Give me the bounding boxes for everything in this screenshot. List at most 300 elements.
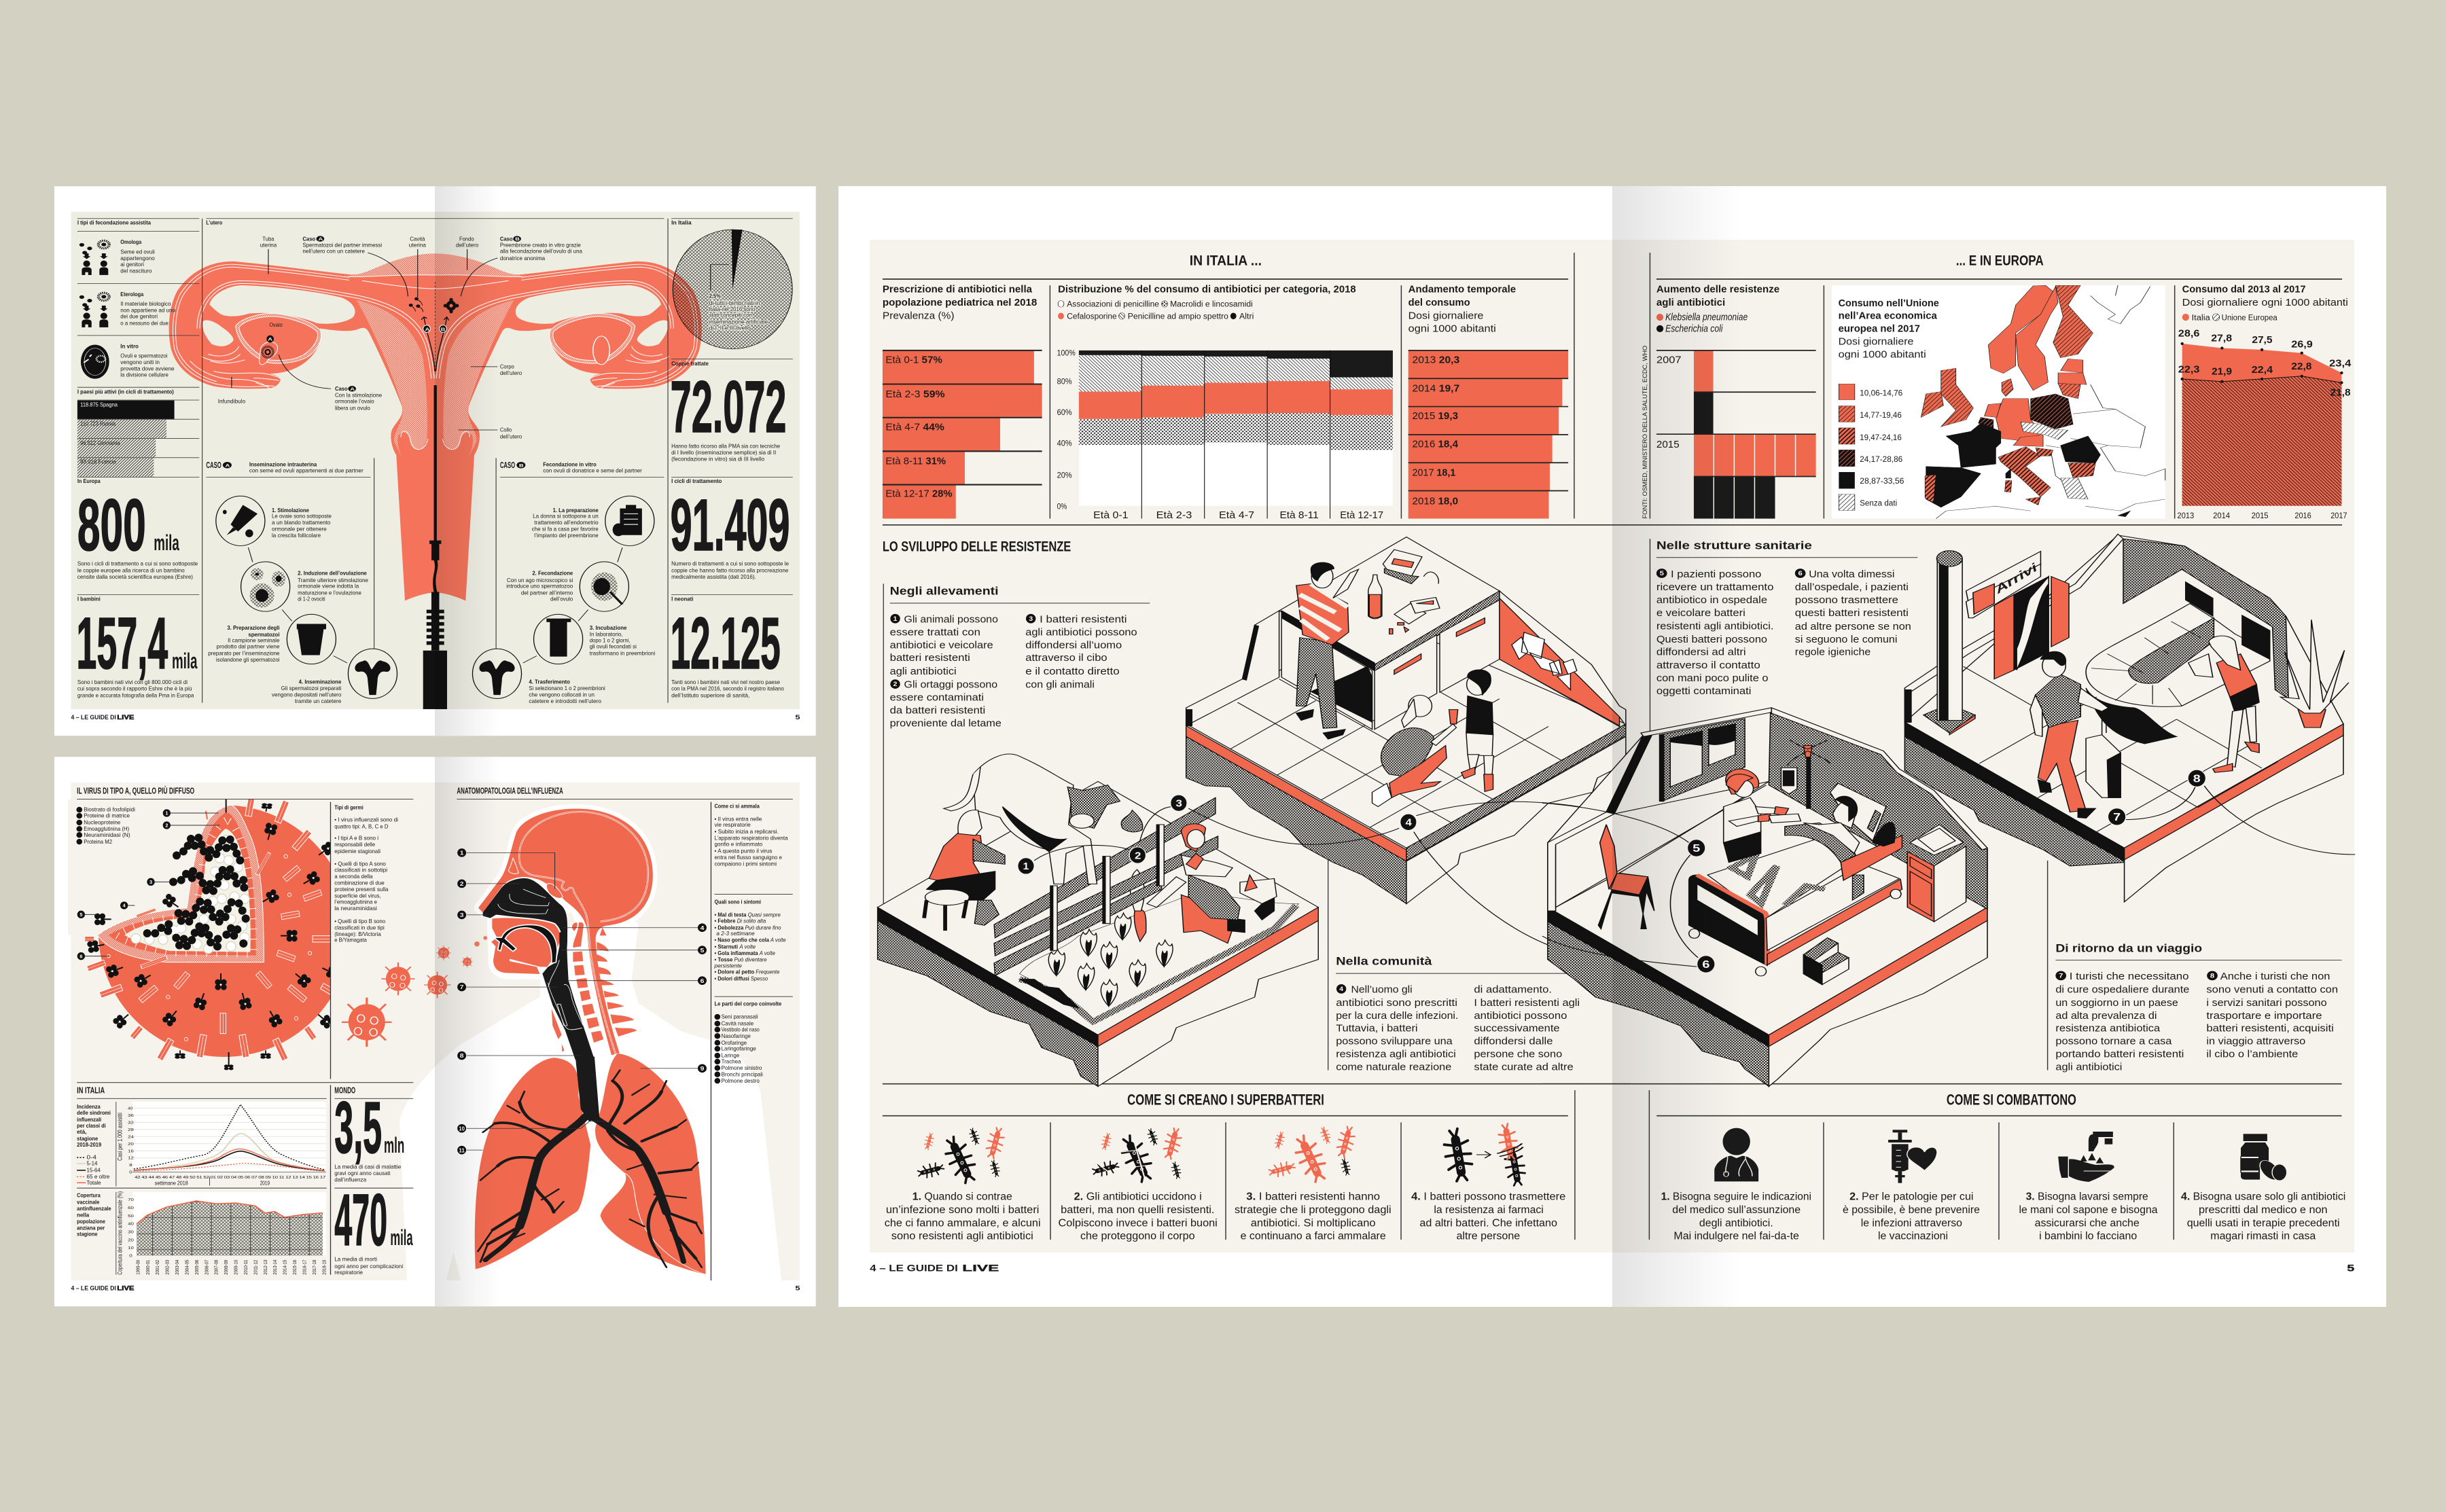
text: on farms: e il contatto diretto: [1025, 665, 1120, 677]
text: steps: del medico sull’assunzione: [1672, 1204, 1801, 1216]
section: in Italia charts: Altri: [1239, 312, 1254, 321]
text over pie chart: [709, 293, 768, 331]
virus legend: Biostrato di fosfolipidi: [84, 807, 135, 813]
text: symptoms and body parts: Cavità nasale: [722, 1021, 754, 1027]
text: case A and case B steps: trasformano in preembrioni: [590, 651, 655, 657]
text: returning from a trip: il cibo o l’ambiente: [2206, 1048, 2298, 1060]
text: on farms: [890, 585, 1137, 729]
footer: [71, 715, 800, 721]
text: left column: dei due genitori: [120, 314, 158, 320]
text: left column: del nascituro: [120, 268, 152, 274]
stacked bar chart: consumption by category: Età 0-1: [1093, 510, 1129, 521]
text: in hospitals: antibiotico in ospedale: [1656, 594, 1767, 605]
rules: [883, 583, 1631, 1084]
circuit lines and markers 1-4: 4: [1406, 816, 1412, 828]
text: left column: provetta dove avviene: [120, 366, 175, 372]
area chart: Italy vs EU consumption: 2013: [2177, 511, 2194, 520]
text: chart headers: ogni 1000 abitanti: [1408, 323, 1496, 334]
virus callouts: 2: [165, 823, 168, 829]
bar chart: paediatric prevalence: Età 12-17 28%: [885, 488, 953, 499]
text: steps: sono resistenti agli antibiotici: [891, 1231, 1033, 1242]
text: right column: In Italia: [671, 220, 692, 226]
text: steps: che ci fanno ammalare, e alcuni: [885, 1218, 1041, 1229]
area chart: Italy vs EU consumption: 22,8: [2291, 361, 2311, 372]
text: left column: ai genitori: [120, 262, 144, 268]
area chart: vaccine coverage: 2004-05: [185, 1259, 190, 1275]
text: steps: 1. Bisogna seguire le indicazioni: [1661, 1191, 1811, 1202]
area chart: Italy vs EU consumption: 2015: [2252, 511, 2269, 520]
text: steps: 1. Quando si contrae: [912, 1191, 1012, 1202]
uterus details in page units: 157,4: [76, 603, 168, 684]
map of Europe: 10,06-14,76: [1860, 389, 1902, 398]
text: case A and case B steps: maturazione e l’ovulazione: [298, 590, 361, 596]
anatomy callouts: 11: [459, 1148, 465, 1154]
text: case A and case B steps: Il campione seminale: [228, 638, 280, 644]
bar chart: trend over time: 2013 20,3: [1413, 355, 1459, 365]
text: uterus labels: ormonale l’ovaio: [335, 399, 374, 405]
area chart: Italy vs EU consumption: [2177, 284, 2352, 520]
text: symptoms and body parts: Trachea: [722, 1059, 741, 1065]
text: types of germs: • I tipi A e B sono i: [334, 835, 378, 842]
text: in hospitals: ricevere un trattamento: [1656, 581, 1773, 592]
text: left column: le coppie europee alla ricerca di un bambino: [77, 568, 185, 574]
area chart: vaccine coverage: 1999-00: [136, 1259, 141, 1275]
stacked bar chart: consumption by category: Età 12-17: [1340, 510, 1383, 521]
text: on farms: antibiotici e veicolare: [890, 639, 993, 651]
text: uterus labels: Caso: [302, 236, 315, 242]
cervical vertebrae: [552, 922, 637, 1051]
icon: medicine bottle: [2241, 1134, 2287, 1181]
text: types of germs: e B/Yamagata: [334, 937, 367, 943]
text: steps: che proteggono il corpo: [1080, 1231, 1195, 1242]
text: types of germs: superficie del virus,: [334, 893, 381, 899]
text: case A and case B steps: CASO: [206, 461, 221, 470]
area chart: Italy vs EU consumption: 22,3: [2178, 364, 2199, 375]
text: in hospitals: Questi batteri possono: [1656, 634, 1767, 645]
skull and spinal canal: [478, 809, 653, 1055]
footer: LIVE: [962, 1263, 999, 1274]
text: community: diffondersi dalle: [1474, 1035, 1553, 1047]
text: types of germs: • Quelli di tipo B sono: [334, 918, 386, 924]
text: types of germs: epidemie stagionali: [334, 848, 380, 854]
nasal cavity: [483, 878, 567, 960]
text: on farms: da batteri resistenti: [890, 704, 985, 716]
text: uterus labels: A: [268, 337, 272, 342]
text: right column: I cicli di trattamento: [671, 478, 722, 484]
text: types of germs: proteine presenti sulla: [334, 886, 389, 893]
text: types of germs: • I virus influenzali sono di: [334, 817, 398, 823]
text: steps: è possibile, è bene prevenire: [1843, 1204, 1980, 1216]
text: uterus labels: Caso: [335, 386, 348, 392]
text: right column: dell’Istituto superiore di sanità,: [671, 693, 749, 699]
text: symptoms and body parts: • Naso gonfio che cola A volte: [715, 937, 786, 943]
text: left column: la divisione cellulare: [120, 372, 169, 378]
text: right column: [671, 220, 789, 699]
text: symptoms and body parts: • Tosse Può diventare: [715, 957, 767, 963]
area chart: vaccine coverage: 2001-02: [156, 1259, 161, 1275]
dotted rear wall: [2123, 539, 2288, 699]
line chart: flu incidence: settimane 2018: [155, 1181, 188, 1187]
text: case A and case B steps: 4. Inseminazione: [299, 679, 342, 685]
text: symptoms and body parts: • A questa punto il virus: [715, 848, 773, 854]
illustration: farm block: [878, 754, 1318, 1086]
bar chart: trend over time: 2015 19,3: [1413, 411, 1458, 422]
stacked bar chart: consumption by category: 100%: [1057, 348, 1076, 357]
text: returning from a trip: un soggiorno in un paese: [2055, 996, 2178, 1008]
virus callouts: [77, 809, 219, 960]
spread: antibiotics page and panel: [838, 186, 2386, 1307]
anatomy callouts: 1: [460, 850, 464, 857]
text: case A and case B steps: introduce uno spermatozoo: [506, 583, 573, 590]
text: returning from a trip: di cure ospedaliere durante: [2055, 984, 2189, 995]
text: case A and case B steps: con seme ed ovuli appartenenti ai due partner: [249, 468, 364, 474]
text: symptoms and body parts: • Febbre Di solito alta: [715, 918, 766, 924]
text: symptoms and body parts: Nasofaringe: [722, 1033, 751, 1039]
text: left column: vengono uniti in: [120, 360, 160, 366]
page: influenza, charts and text: mila: [390, 1226, 413, 1250]
text: on farms: essere trattati con: [890, 626, 980, 638]
text: left column: [77, 220, 198, 699]
line chart: flu incidence: 12: [128, 1157, 134, 1160]
reception desk: [2086, 582, 2270, 744]
uterus details in page units: [71, 219, 800, 721]
area chart: vaccine coverage: 50: [128, 1214, 134, 1219]
area chart: vaccine coverage: popolazione: [77, 1219, 105, 1225]
text: on farms: diffondersi all’uomo: [1025, 639, 1122, 651]
bar chart: paediatric prevalence: Età 0-1 57%: [885, 355, 942, 365]
line chart: flu incidence: Casi per 1.000 assistiti: [116, 1113, 124, 1161]
footer: [71, 1285, 800, 1292]
text: steps: degli antibiotici.: [1699, 1218, 1773, 1229]
text: case A and case B steps: Le ovaie sono sottoposte: [272, 514, 332, 520]
text: uterus labels: Ovaio: [269, 322, 283, 328]
text: in hospitals: questi batteri resistenti: [1795, 607, 1909, 618]
rules: [883, 1090, 1575, 1240]
area chart: Italy vs EU consumption: 21,9: [2212, 366, 2232, 377]
text: in hospitals: 6: [1798, 570, 1803, 577]
text: on farms: agli antibiotici: [890, 665, 957, 677]
text: uterus labels: A: [425, 327, 429, 332]
nurse: [1724, 769, 1801, 863]
left lung: [475, 1058, 590, 1269]
bar chart: trend over time: 2014 19,7: [1413, 383, 1459, 394]
hatched shell: [97, 805, 264, 962]
rules: [1649, 1090, 2341, 1240]
line chart: flu incidence: 20: [128, 1142, 134, 1146]
text: returning from a trip: Di ritorno da un viaggio: [2055, 941, 2202, 954]
area chart: vaccine coverage: vaccinale: [77, 1200, 100, 1206]
text: case A and case B steps: Tramite ulteriore stimolazione: [298, 577, 368, 583]
area chart: Italy vs EU consumption: Italia: [2192, 313, 2210, 322]
big numbers: world: dall’influenza: [334, 1177, 367, 1183]
text: types of germs: classificati in sottotipi: [334, 867, 387, 874]
text: left column: I bambini: [77, 596, 101, 602]
nucleoproteins: [147, 838, 246, 946]
anatomy callouts: 3: [460, 912, 464, 919]
text: case A and case B steps: Inseminazione intrauterina: [249, 462, 317, 468]
text: right column: Tanti sono i bambini nati vivi nel nostro paese: [671, 679, 780, 685]
line chart: flu incidence: 15-64: [87, 1168, 101, 1174]
text: case A and case B steps: [206, 461, 655, 705]
area chart: Italy vs EU consumption: 23,4: [2329, 358, 2352, 369]
line chart: flu incidence: 32: [128, 1121, 134, 1125]
text: left column: I tipi di fecondazione assistita: [77, 220, 151, 226]
text: symptoms and body parts: Polmone destro: [722, 1078, 760, 1084]
text: case A and case B steps: gli ovuli fecondati si: [590, 644, 637, 650]
text: symptoms and body parts: Quali sono i sintomi: [715, 899, 761, 905]
gardener: [1147, 824, 1277, 943]
bar chart: rising resistance: [1656, 284, 1816, 519]
area chart: vaccine coverage: antinfluenzale: [77, 1206, 111, 1212]
area chart: vaccine coverage: 2009-10: [234, 1259, 239, 1275]
map of Europe: [1832, 285, 2165, 519]
airport circuit and markers 7-8: 8: [2193, 773, 2201, 785]
map of Europe: Dosi giornaliere: [1839, 336, 1913, 347]
text: returning from a trip: resistenza antibiotica: [2055, 1022, 2161, 1034]
text: steps: assicurarsi che anche: [2035, 1218, 2140, 1229]
text: uterus labels: Tuba: [262, 236, 274, 242]
section: in Europa charts: ... E IN EUROPA: [1956, 252, 2044, 268]
map legend: [1839, 384, 1904, 510]
footer: 5: [795, 1285, 800, 1292]
line chart: flu incidence: 16: [128, 1149, 134, 1153]
text: steps: [885, 1191, 1565, 1242]
potted plant: [2280, 619, 2349, 727]
area chart: vaccine coverage: 2006-07: [205, 1259, 210, 1275]
right ovary follicle: [593, 336, 609, 365]
virus legend: Neuraminidasi (N): [84, 832, 130, 838]
stacked bar chart: consumption by category: 20%: [1057, 470, 1072, 480]
text: returning from a trip: sono venuti a contatto con: [2206, 984, 2338, 995]
text: steps: ad altri batteri. Che infettano: [1419, 1218, 1557, 1229]
text: case A and case B steps: 3. Incubazione: [590, 625, 627, 631]
small ovals: [107, 854, 312, 1041]
section: in Italia charts: Macrolidi e lincosamidi: [1170, 300, 1253, 309]
text: uterus labels: alla fecondazione dell’ovulo di una: [500, 249, 582, 255]
text: left column: grande e accurata fotografia della Pma in Europa: [77, 693, 194, 699]
text: community: persone che sono: [1474, 1048, 1562, 1060]
text: steps: antibiotici. Si moltiplicano: [1251, 1218, 1376, 1229]
chart: most active countries: 96.512 Germania: [80, 440, 120, 446]
text: left column: In Europa: [77, 478, 101, 484]
text: symptoms and body parts: Vestibolo del naso: [722, 1027, 760, 1033]
text: returning from a trip: portando batteri resistenti: [2055, 1048, 2184, 1060]
text: returning from a trip: 7: [2059, 972, 2063, 979]
area chart: vaccine coverage: 2013-14: [272, 1259, 278, 1275]
text: case A and case B steps: Fecondazione in vitro: [543, 462, 597, 468]
section rules: [1617, 253, 2342, 525]
section rules: [883, 253, 1617, 525]
text: types of germs: a seconda della: [334, 874, 373, 880]
text: case A and case B steps: vengono depositati nell’utero: [272, 692, 342, 698]
virus legend: [76, 807, 135, 845]
text: case A and case B steps: trattamento all’endometrio: [534, 520, 599, 526]
circuit lines and markers 1-4: 1: [1023, 861, 1029, 872]
lipid eggs: [136, 840, 245, 949]
text: uterus labels: uterina: [409, 242, 426, 249]
bar chart: trend over time: 2016 18,4: [1413, 439, 1458, 450]
text: uterus labels: B: [441, 327, 445, 332]
non-EU outlines: [1936, 285, 2165, 519]
legend: categories: Penicilline ad ampio spettro: [1128, 312, 1228, 321]
text: case A and case B steps: l’impianto del preembrione: [534, 533, 599, 539]
text: symptoms and body parts: • Gola infiammata A volte: [715, 950, 775, 957]
text: symptoms and body parts: Polmone sinistro: [722, 1065, 762, 1071]
area chart: vaccine coverage: 70: [128, 1198, 134, 1202]
virus callouts: 3: [149, 879, 152, 885]
white halo: [478, 809, 653, 975]
ovary: [236, 313, 321, 363]
farmer: [924, 810, 1005, 931]
text: steps: Mai indulgere nel fai-da-te: [1673, 1231, 1799, 1242]
countries by dose: [1921, 285, 2130, 517]
text: symptoms and body parts: Bronchi principali: [722, 1072, 763, 1078]
text: returning from a trip: in viaggio attraverso: [2206, 1035, 2305, 1047]
area chart: vaccine coverage: 2012-13: [263, 1259, 268, 1275]
text: in hospitals: possono trasmettere: [1795, 594, 1898, 605]
text: uterus labels: Con la stimolazione: [335, 393, 382, 399]
area chart: Italy vs EU consumption: 22,4: [2252, 364, 2273, 376]
page: influenza, white page, panel and body silhouette: [54, 757, 816, 1306]
text: types of germs: la neuraminidasi: [334, 905, 377, 912]
area chart: vaccine coverage: 2008-09: [224, 1259, 229, 1275]
area chart: Italy vs EU consumption: 27,8: [2211, 333, 2232, 344]
bar chart: trend over time: 2018 18,0: [1413, 496, 1458, 507]
virus legend: Emoagglutinina (H): [84, 826, 129, 832]
text: steps: 2. Gli antibiotici uccidono i: [1074, 1191, 1202, 1202]
map of Europe: 19,47-24,16: [1860, 433, 1902, 442]
text: steps: le vaccinazioni: [1878, 1231, 1948, 1242]
text: 12.125: [671, 603, 781, 684]
anatomy callouts: 9: [701, 1066, 705, 1072]
area chart: vaccine coverage: 2015-16: [292, 1259, 298, 1275]
hospital circuit and markers 5-6: 5: [1692, 843, 1700, 854]
text: uterus labels: Infundibulo: [218, 399, 246, 405]
area chart: vaccine coverage: 2007-08: [214, 1259, 219, 1275]
text: chart headers: popolazione pediatrica nel 2018: [883, 297, 1037, 308]
text: in hospitals: 5: [1660, 570, 1664, 577]
line chart: flu incidence: 8: [129, 1164, 132, 1168]
text: types of germs: quattro tipi: A, B, C e D: [334, 824, 389, 830]
text: chart headers: [883, 284, 1516, 334]
bar chart: paediatric prevalence: Età 4-7 44%: [885, 422, 944, 433]
area chart: vaccine coverage: 60: [128, 1206, 134, 1210]
text: case A and case B steps: spermatozoi: [248, 632, 280, 638]
text: right column: di I livello (inseminazione semplice) sia di II: [671, 450, 776, 456]
text: in hospitals: attraverso il contatto: [1656, 659, 1760, 670]
title: IL VIRUS DI TIPO A, QUELLO PIÙ DIFFUSO: [77, 786, 194, 796]
line chart: flu incidence: Incidenza: [77, 1104, 101, 1110]
stacked bar chart: consumption by category: Età 2-3: [1156, 510, 1192, 521]
lower face: [491, 917, 561, 975]
fork to A and B: [421, 317, 449, 372]
illustration: airport block: Arrivi: [1992, 560, 2041, 596]
text: symptoms and body parts: • Debolezza Può durare fino: [715, 925, 781, 931]
virus callouts: 6: [79, 953, 82, 959]
kitchen wall: [1186, 611, 1279, 725]
icon: bacteria step 2: [1091, 1127, 1184, 1185]
area chart: Italy vs EU consumption: 27,5: [2252, 334, 2272, 345]
section: in Europa charts: [1617, 252, 2352, 525]
area chart: vaccine coverage: Copertura del vaccino antinfluenzale (%): [116, 1191, 124, 1275]
text: in hospitals: resistenti agli antibiotici.: [1656, 620, 1773, 632]
text: case A and case B steps: tramite un catetere: [295, 699, 341, 705]
text: on farms: Negli allevamenti: [890, 585, 999, 597]
stacked bar chart: consumption by category: 60%: [1057, 408, 1072, 417]
text: case A and case B steps: 1. La preparazione: [553, 507, 599, 514]
text: uterus labels: dell’utero: [500, 370, 522, 376]
text: right column: (fecondazione in vitro) sia di III livello: [671, 456, 765, 463]
text: right column: Hanno fatto ricorso alla PMA sia con tecniche: [671, 444, 780, 450]
dome hatching: [340, 253, 436, 276]
icon: bacteria step 4: [1441, 1123, 1527, 1187]
text: on farms: attraverso il cibo: [1025, 652, 1107, 664]
bar chart: rising resistance: 2007: [1656, 355, 1682, 365]
arrivals sign: [1966, 552, 2040, 618]
text: community: 4: [1339, 986, 1344, 993]
tongue airway: [495, 924, 557, 963]
holes between tube and ovary: [202, 285, 355, 346]
step icons: [216, 496, 654, 698]
text: community: antibiotici possono: [1474, 1009, 1567, 1021]
text: left column: cui sopra secondo il rapporto Eshre che è la più: [77, 686, 192, 692]
virus legend: Proteine di matrice: [84, 813, 130, 819]
text: left column: Il materiale biologico: [120, 301, 171, 307]
text: community: come naturale reazione: [1336, 1061, 1451, 1073]
page: assisted fertilisation, white page with panel: [54, 186, 816, 736]
text: symptoms and body parts: Le parti del corpo coinvolte: [715, 1001, 782, 1007]
text: returning from a trip: [2055, 941, 2338, 1073]
text: on farms: batteri resistenti: [890, 652, 970, 664]
anatomy callouts: 6: [701, 978, 705, 984]
pillar: [1924, 551, 1975, 735]
text: case A and case B steps: Con un ago microscopico si: [507, 577, 573, 583]
throat: [542, 929, 595, 1060]
stacked bar chart: consumption by category: Età 4-7: [1219, 510, 1254, 521]
big numbers: world: La media di morti: [334, 1257, 377, 1263]
text: left column: Sono i bambini nati vivi con gli 800.000 cicli di: [77, 679, 188, 685]
text: case A and case B steps: La donna si sottopone a un: [533, 514, 599, 520]
circuit lines and markers 1-4: 2: [1135, 850, 1141, 861]
text: case A and case B steps: catetere e introdotti nell’utero: [529, 699, 602, 705]
text: uterus labels: Preembrione creato in vitro grazie: [500, 242, 581, 249]
text: symptoms and body parts: vie respiratorie: [715, 823, 751, 829]
virus callouts: 4: [123, 903, 126, 909]
area chart: vaccine coverage: 0: [129, 1254, 132, 1258]
text: case A and case B steps: dell’ovulo: [550, 596, 573, 602]
side wall and window: [1548, 708, 1777, 911]
page fold shading: [435, 186, 1741, 1307]
legend: categories: [1058, 300, 1254, 321]
text: case A and case B steps: ormonale viene indotta la: [298, 583, 359, 590]
cow: [944, 754, 1120, 884]
map of Europe: 28,87-33,56: [1860, 476, 1904, 486]
text: right column: Numero di trattamenti a cui si sono sottoposte le: [671, 561, 789, 567]
text: case A and case B steps: prodotto dal partner viene: [217, 644, 280, 650]
area chart: vaccine coverage: 2000-01: [145, 1259, 151, 1275]
text: on farms: I batteri resistenti: [1040, 613, 1127, 625]
area chart: vaccine coverage: 2014-15: [283, 1259, 288, 1275]
line chart: flu incidence: 24: [128, 1135, 134, 1139]
line chart: flu incidence: [77, 1102, 326, 1187]
text: symptoms and body parts: compaiono i primi sintomi: [715, 861, 777, 867]
text: case A and case B steps: A: [226, 463, 230, 468]
anatomy callouts: [457, 848, 707, 1154]
area chart: Italy vs EU consumption: 28,6: [2178, 328, 2199, 339]
area chart: Italy vs EU consumption: 2017: [2330, 511, 2347, 520]
text: 91.409: [671, 485, 790, 566]
text: on farms: con gli animali: [1025, 679, 1095, 690]
